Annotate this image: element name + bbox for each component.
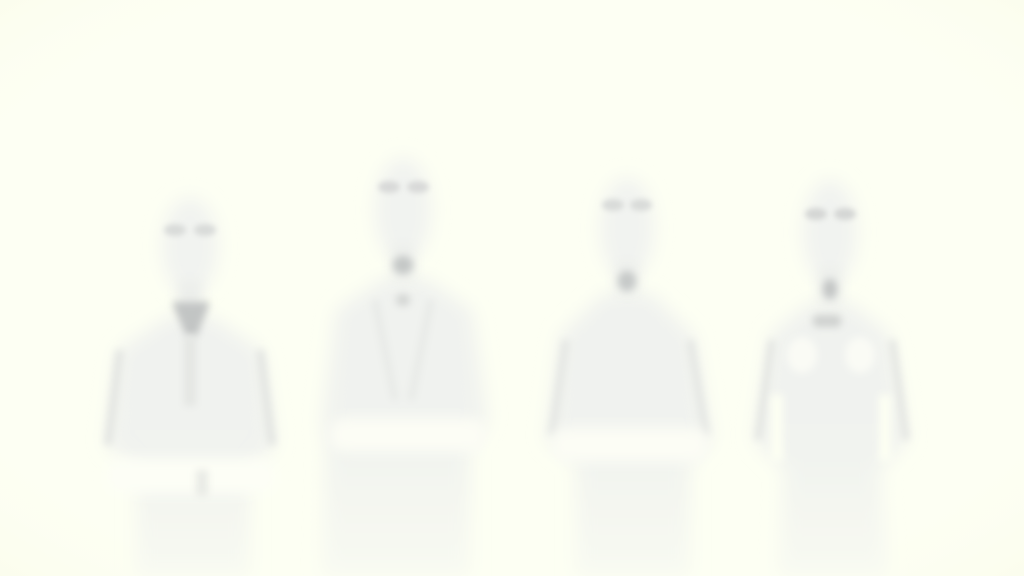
figure 4 — [754, 180, 908, 576]
figure 1 — [106, 198, 276, 576]
figure 3 — [546, 178, 712, 576]
figure 2 — [322, 158, 488, 576]
